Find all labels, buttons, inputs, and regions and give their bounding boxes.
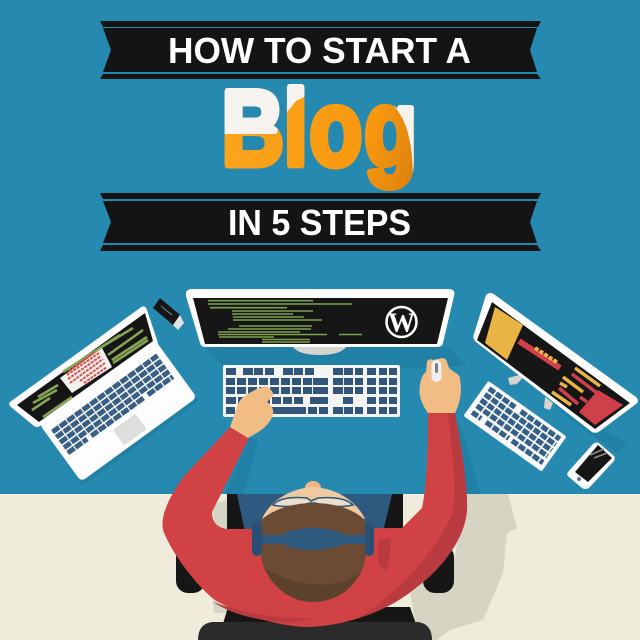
laptop trackpad [113,414,147,445]
usb stick [153,298,184,330]
background: blue desk [0,0,640,494]
computer mouse [432,360,442,382]
red text bars [559,374,597,404]
smartphone [567,442,615,489]
heading: how to start a: HOW TO START A [168,30,471,71]
shadows on desk [40,347,627,494]
laptop keyboard [52,356,173,453]
left hand [230,386,273,438]
laptop base [39,340,197,482]
right keyboard [463,381,567,472]
icon: wordpress logo: W [388,308,415,338]
bottom banner [100,193,541,251]
floor shadow [212,494,517,640]
chair blue backrest [237,494,392,532]
top banner [100,21,541,79]
sweater shading [213,413,467,622]
right keyboard keys [489,389,560,439]
red block [579,390,623,425]
chair seat [222,607,417,627]
headset [252,522,374,556]
laptop code lines [32,328,148,417]
monitor stand [293,347,346,355]
chair base [198,622,432,640]
background: floor [0,494,640,640]
office chair [176,494,454,640]
phone screen [575,445,612,482]
laptop screen [17,313,153,422]
right hand with mouse [419,358,461,413]
blog wordmark: Blog [222,68,417,188]
side monitor frame [473,293,638,433]
monitor screen [193,298,448,344]
monitor code lines [208,301,362,342]
phone glare [590,449,607,458]
glasses [273,498,353,506]
monitor frame [186,289,454,347]
nose [305,481,321,495]
person: red sweater [162,413,467,627]
yellow panel [485,307,523,360]
side monitor stand [508,373,553,410]
phone home button [577,477,581,481]
person: head [252,481,374,602]
forehead and face [262,487,365,519]
yellow text bars [552,368,600,405]
heading: in 5 steps: IN 5 STEPS [228,202,411,243]
hair shadow [264,568,362,602]
laptop [9,306,197,482]
side monitor screen [477,302,630,429]
chair back [227,494,403,534]
left armrest [176,545,205,593]
keyboard keys [226,372,397,410]
hair [260,503,367,602]
laptop lid [9,306,158,427]
right armrest [423,545,454,593]
star rating [535,348,558,363]
desktop monitor [186,289,454,355]
red title bar [519,341,560,368]
laptop window with red code [60,348,112,393]
mouse wheel [435,363,438,373]
desktop keyboard [223,365,400,417]
blog wordmark: Blog [222,68,417,188]
right side monitor [473,293,638,433]
